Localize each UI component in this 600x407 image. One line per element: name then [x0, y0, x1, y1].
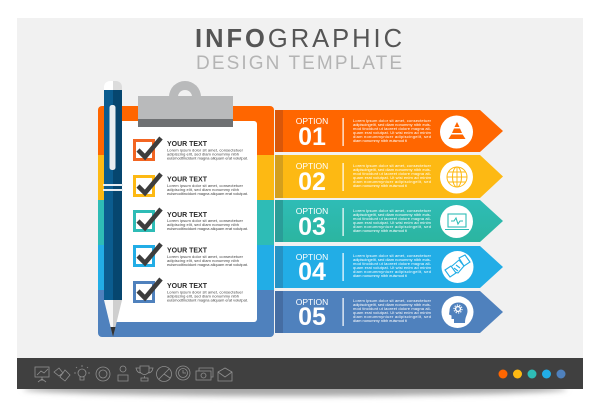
checklist item 1: adipiscing elit, sed diam nonummy nibh [167, 152, 239, 156]
option 2 arrow: mod tincidunt ut laoreet dolore magna ali- [353, 171, 432, 176]
option 3 arrow: diam nonummyniuer adipiscingelit, sed [353, 224, 431, 229]
option 5 arrow: quam erat volutpat. Ut wisi enim ad minim [353, 310, 432, 315]
checklist item 5: adipiscing elit, sed diam nonummy nibh [167, 294, 239, 298]
option 3 arrow: 03 [298, 213, 326, 241]
clipboard board [98, 106, 274, 337]
title: INFOGRAPHIC [195, 25, 402, 53]
option 2 arrow [275, 155, 503, 198]
footer icons [35, 365, 232, 382]
checklist item 1: YOUR TEXT [167, 141, 208, 148]
option 5 arrow: adipiscingelit, sed diam nonummy nibh euis- [353, 302, 432, 307]
icon: gear [96, 367, 110, 381]
checklist item 2: euismodtincidunt magna aliquam erat volutpat. [167, 191, 248, 196]
icon: clock [176, 366, 190, 380]
option 3 arrow: diam nonummy nibh euismod ti [353, 228, 407, 233]
icon: light bulb [74, 365, 90, 380]
checklist item 3: YOUR TEXT [167, 212, 208, 219]
background panel [17, 18, 583, 358]
option 4 arrow: adipiscingelit, sed diam nonummy nibh euis- [353, 257, 432, 262]
option 1 arrow: mod tincidunt ut laoreet dolore magna ali- [353, 126, 432, 131]
option 5 arrow: 05 [298, 303, 326, 331]
icon: globe [447, 167, 467, 187]
checklist item 2 [134, 174, 248, 196]
footer bar [17, 358, 583, 389]
option 4 arrow: quam erat volutpat. Ut wisi enim ad minim [353, 265, 432, 270]
icon: presentation board [35, 367, 49, 382]
option 3 arrow: adipiscingelit, sed diam nonummy nibh euis- [353, 212, 432, 217]
option 2 arrow: quam erat volutpat. Ut wisi enim ad minim [353, 175, 432, 180]
option 2 arrow: adipiscingelit, sed diam nonummy nibh euis- [353, 167, 432, 172]
option 5 arrow: diam nonummy nibh euismod ti [353, 318, 407, 323]
option 3 arrow: mod tincidunt ut laoreet dolore magna ali- [353, 216, 432, 221]
option 5 arrow [275, 291, 503, 333]
checklist item 1: Lorem ipsum dolor sit amet, consectetuer [167, 148, 244, 152]
icon: banknotes [196, 368, 213, 380]
option 2 arrow: 02 [298, 168, 326, 196]
icon: person [118, 366, 128, 381]
option 1 arrow: diam nonummyniuer adipiscingelit, sed [353, 134, 431, 139]
colour dots [498, 370, 566, 378]
icon: pie chart [156, 366, 172, 382]
option 3 arrow: Lorem ipsum dolor sit amet, consectetuer [353, 208, 432, 213]
checklist item 3 [134, 209, 248, 231]
checklist item 1 [134, 138, 248, 160]
option 4 arrow: Lorem ipsum dolor sit amet, consectetuer [353, 253, 432, 258]
option 2 arrow: Lorem ipsum dolor sit amet, consectetuer [353, 163, 432, 168]
option 2 arrow: diam nonummy nibh euismod ti [353, 183, 407, 188]
title [195, 25, 402, 74]
pen [103, 81, 123, 337]
option 2 arrow: diam nonummyniuer adipiscingelit, sed [353, 179, 431, 184]
icon: handshake outline [54, 368, 70, 381]
option 1 arrow: adipiscingelit, sed diam nonummy nibh euis- [353, 122, 432, 127]
icon: laptop [445, 214, 469, 230]
checklist item 3: Lorem ipsum dolor sit amet, consectetuer [167, 218, 244, 223]
icon: pyramid [448, 122, 466, 139]
option 1 arrow: diam nonummy nibh euismod ti [353, 138, 407, 143]
option 1 arrow [275, 110, 503, 152]
bar shadow [23, 382, 567, 396]
checklist item 3: adipiscing elit, sed diam nonummy nibh [167, 222, 239, 227]
option 1 arrow: quam erat volutpat. Ut wisi enim ad minim [353, 130, 432, 135]
option 1 arrow: Lorem ipsum dolor sit amet, consectetuer [353, 118, 432, 123]
checklist item 3: euismodtincidunt magna aliquam erat volutpat. [167, 226, 248, 231]
option 3 arrow [275, 200, 503, 242]
icon: trophy [136, 366, 153, 381]
checklist item 5 [134, 279, 248, 302]
checklist item 2: YOUR TEXT [167, 176, 208, 184]
checklist item 1: euismodtincidunt magna aliquam erat volutpat. [167, 156, 248, 160]
checklist item 5: YOUR TEXT [167, 283, 208, 290]
option 4 arrow [275, 246, 503, 288]
paper sheet [112, 121, 257, 322]
option 3 arrow: quam erat volutpat. Ut wisi enim ad minim [353, 220, 432, 225]
option 4 arrow: OPTION [296, 252, 328, 262]
option 1 arrow: OPTION [296, 116, 328, 126]
icon: handshake [445, 255, 470, 277]
checklist item 4: adipiscing elit, sed diam nonummy nibh [167, 258, 239, 263]
icon: envelope [218, 368, 232, 381]
checklist item 5: euismodtincidunt magna aliquam erat volutpat. [167, 298, 248, 302]
option 4 arrow: diam nonummy nibh euismod ti [353, 273, 407, 278]
clip [138, 81, 233, 127]
checklist item 4: euismodtincidunt magna aliquam erat volutpat. [167, 262, 248, 267]
checklist item 5: Lorem ipsum dolor sit amet, consectetuer [167, 290, 244, 294]
checklist item 4 [134, 244, 248, 267]
option 4 arrow: 04 [298, 258, 326, 286]
option 4 arrow: mod tincidunt ut laoreet dolore magna ali- [353, 261, 432, 266]
option 5 arrow: Lorem ipsum dolor sit amet, consectetuer [353, 298, 432, 303]
option 1 arrow: 01 [298, 123, 326, 151]
icon: head with gear [449, 302, 468, 323]
option 3 arrow: OPTION [296, 206, 328, 216]
checklist item 2: Lorem ipsum dolor sit amet, consectetuer [167, 183, 244, 188]
title: DESIGN TEMPLATE [196, 53, 402, 74]
option 2 arrow: OPTION [296, 161, 328, 171]
option 5 arrow: OPTION [296, 297, 328, 307]
checklist item 2: adipiscing elit, sed diam nonummy nibh [167, 187, 239, 192]
checklist item 4: Lorem ipsum dolor sit amet, consectetuer [167, 254, 244, 259]
option 5 arrow: mod tincidunt ut laoreet dolore magna ali- [353, 306, 432, 311]
checklist item 4: YOUR TEXT [167, 248, 208, 254]
option 4 arrow: diam nonummyniuer adipiscingelit, sed [353, 269, 431, 274]
option 5 arrow: diam nonummyniuer adipiscingelit, sed [353, 314, 431, 319]
